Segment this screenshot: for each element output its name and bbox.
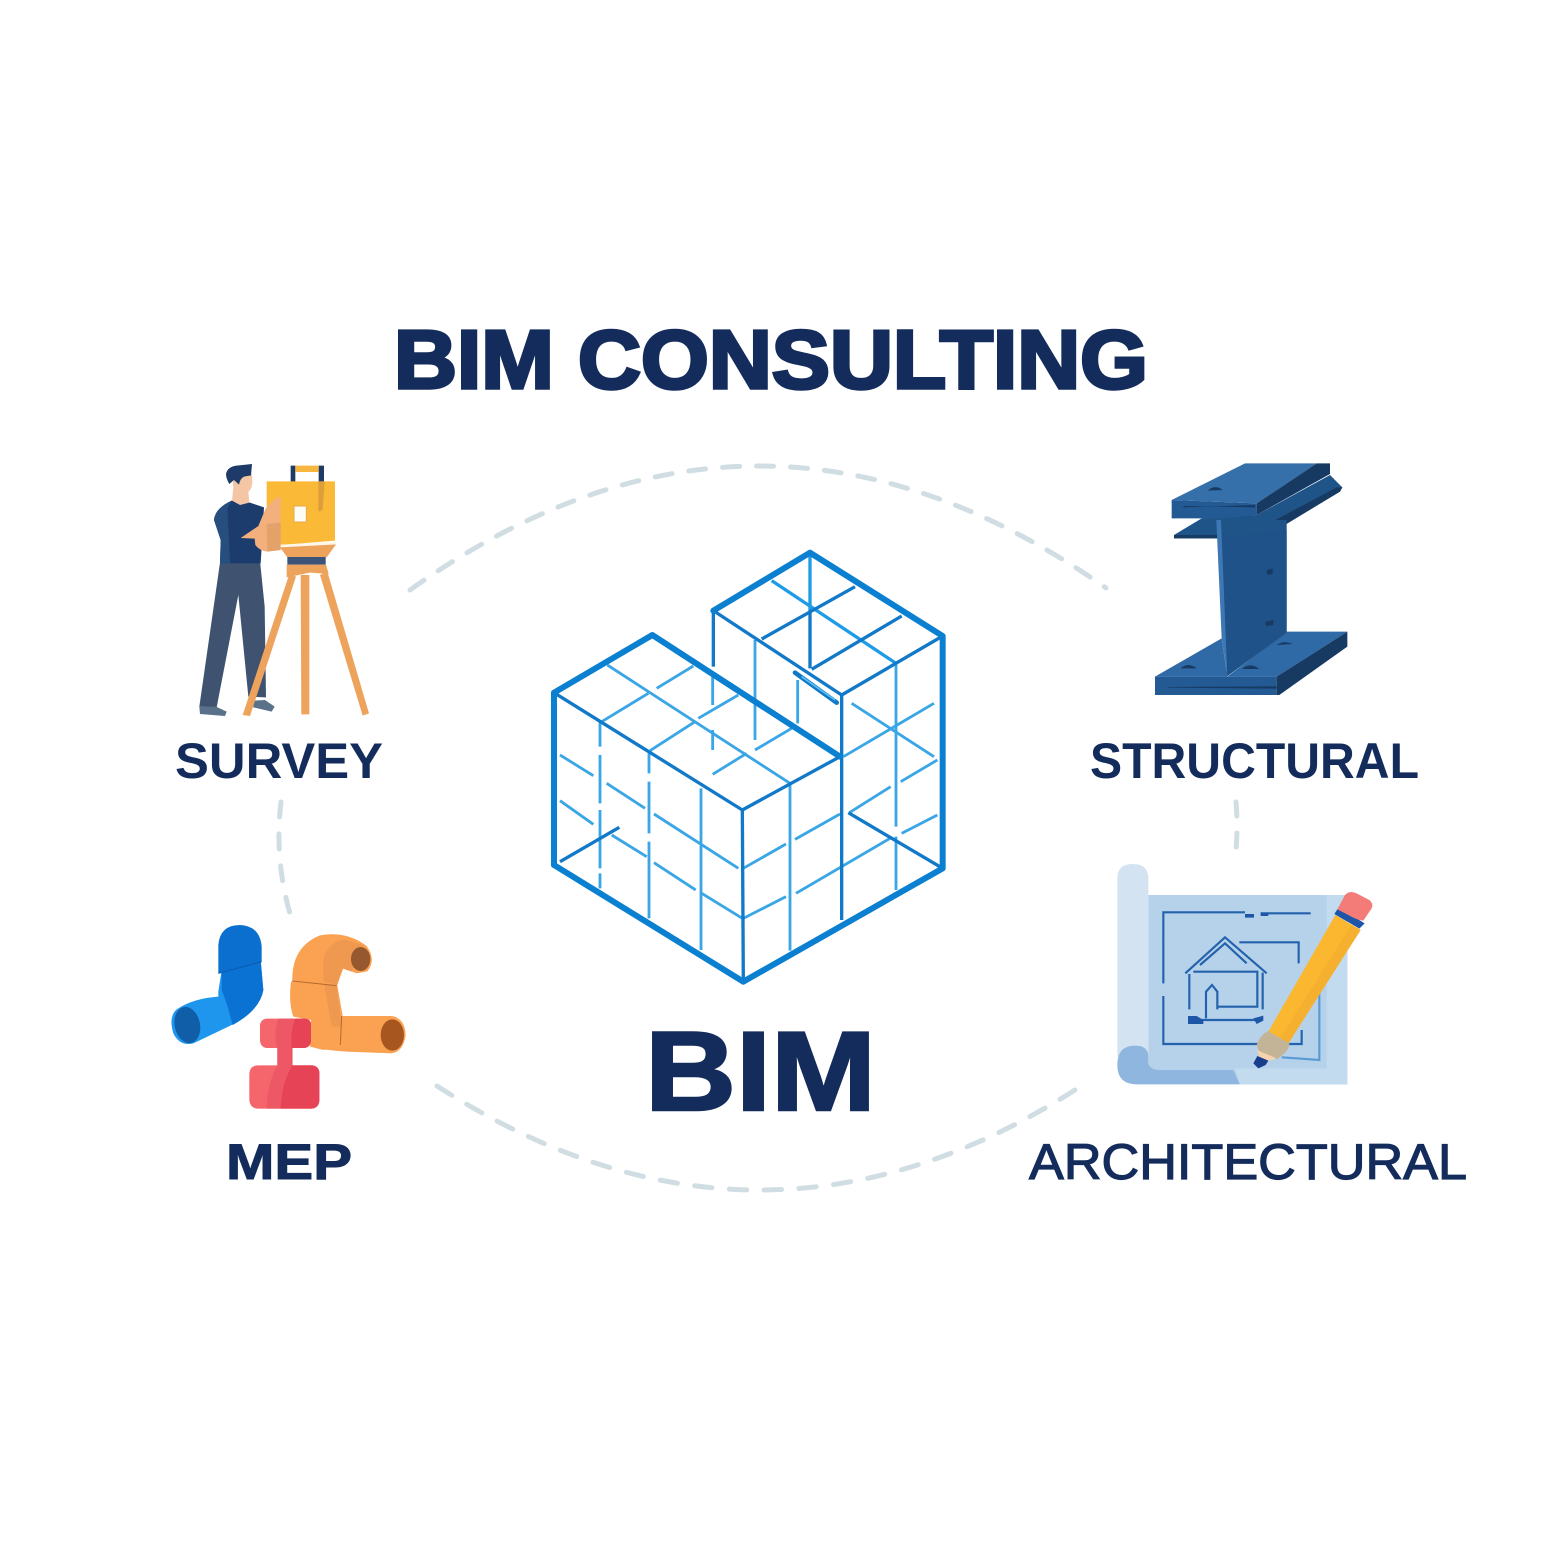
orange far opening: [381, 1019, 404, 1051]
blue elbow shade: [222, 960, 263, 1025]
BIM label: BIM: [645, 1009, 876, 1134]
band: [287, 557, 326, 565]
icon: MEP pipes: [171, 925, 406, 1109]
instrument handle: [291, 466, 324, 482]
pencil body: [1268, 915, 1361, 1043]
top flange top: [1172, 463, 1317, 503]
small connector highlight: [802, 677, 835, 700]
pencil shade: [1280, 925, 1361, 1043]
dashed connector: bottom arc: [437, 1086, 1075, 1190]
SURVEY label: SURVEY: [175, 733, 383, 789]
medium edge lines: [554, 587, 943, 982]
wood tip: [1257, 1050, 1277, 1061]
tripod head: [280, 544, 336, 557]
orange seam: [292, 981, 342, 1045]
orange pipe horizontal: [313, 1016, 406, 1053]
red mid tone: [267, 1019, 319, 1109]
orange shade: [323, 939, 363, 1027]
web highlight: [1216, 520, 1227, 676]
dashed connector: left: [279, 802, 291, 917]
icon: structural steel I-beam: [1155, 463, 1347, 695]
blue elbow lower: [171, 960, 263, 1044]
hair: [226, 464, 252, 485]
icon: blueprint with pencil: [1117, 864, 1372, 1084]
tripod legs: [243, 572, 369, 716]
icon: surveyor with tripod: [199, 464, 369, 716]
title: BIM CONSULTING: [394, 313, 1148, 406]
red fitting: [249, 1019, 319, 1109]
top flange front: [1172, 500, 1257, 518]
blue seam: [218, 962, 262, 973]
orange openings: [351, 947, 370, 971]
pencil band: [1334, 907, 1365, 929]
roll bottom: [1117, 1046, 1240, 1084]
dashed connector: top arc: [410, 466, 1106, 590]
lead: [1253, 1056, 1268, 1068]
blueprint sheet: [1148, 895, 1347, 1084]
ARCHITECTURAL label: ARCHITECTURAL: [1029, 1134, 1467, 1190]
dashed connector: right: [1236, 802, 1237, 850]
bottom slot and bolts: [1168, 568, 1293, 689]
MEP label: MEP: [226, 1134, 352, 1190]
trousers: [199, 561, 266, 707]
white plate: [281, 542, 336, 547]
plan accents: [1188, 913, 1268, 1024]
sheet right shade: [1235, 895, 1347, 1084]
dark lip edge: [1174, 487, 1342, 538]
red shade: [281, 1019, 319, 1109]
orange elbow top: [292, 934, 372, 986]
top flange side: [1257, 463, 1330, 515]
hand shade: [267, 523, 281, 552]
collar: [287, 565, 329, 577]
orange elbow body: [290, 982, 343, 1050]
web: [1217, 520, 1287, 677]
blue elbow top: [218, 925, 262, 973]
STRUCTURAL label: STRUCTURAL: [1090, 733, 1419, 789]
roll: [1117, 864, 1148, 1057]
web over bottom: [1222, 530, 1287, 676]
bottom flange side: [1277, 632, 1347, 695]
handle top: [295, 466, 319, 472]
torso: [214, 501, 264, 563]
bottom flange front: [1155, 677, 1277, 695]
shoes: [199, 700, 275, 716]
ferrule: [1257, 1031, 1289, 1059]
lower rear flange lip: [1174, 475, 1342, 538]
light grid lines: [560, 640, 937, 951]
arm and hands: [241, 496, 281, 552]
bottom flange top: [1155, 632, 1347, 677]
plan lines: [1163, 912, 1319, 1060]
body shadow: [318, 481, 325, 512]
window: [294, 506, 306, 522]
neck and face: [232, 474, 252, 505]
tower roof grid lines: [772, 555, 896, 663]
instrument body: [267, 481, 335, 545]
blue pipe opening: [171, 1004, 204, 1046]
central isometric BIM wireframe: [554, 553, 943, 982]
top slot and bolt: [1183, 487, 1255, 507]
eraser: [1337, 892, 1372, 921]
small connector detail: [795, 673, 837, 703]
thick outer outline: [554, 553, 943, 982]
sleeve: [214, 501, 232, 563]
